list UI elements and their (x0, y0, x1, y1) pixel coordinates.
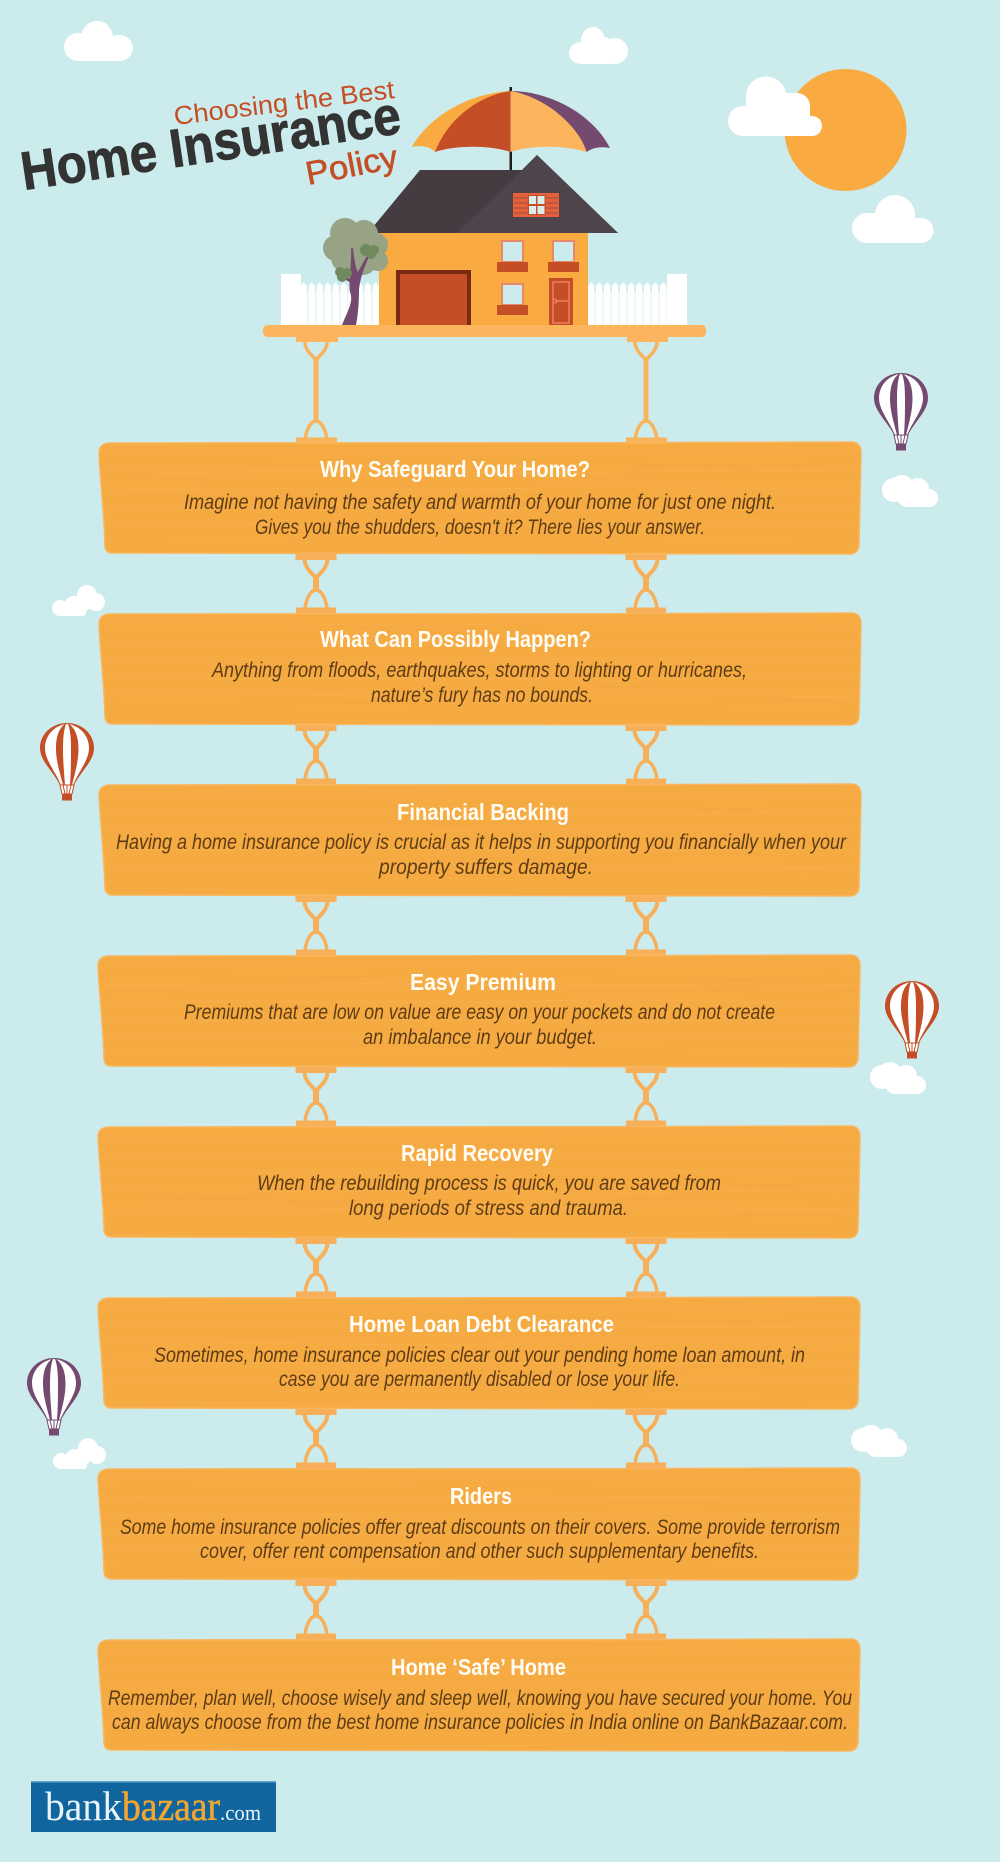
heading: Rapid Recovery (401, 1140, 553, 1166)
logo text: bank: bank (45, 1783, 122, 1829)
title line: Home Insurance: Home Insurance (17, 85, 404, 202)
heading: What Can Possibly Happen? (320, 626, 591, 652)
cloud: right of board 6 (851, 1425, 907, 1457)
body text: Anything from floods, earthquakes, storms to lighting or hurricanes, (210, 658, 747, 682)
icon: purple balloon top right (874, 373, 928, 450)
window upper right (548, 241, 579, 272)
heading: Home ‘Safe’ Home (391, 1654, 566, 1680)
window lower (497, 284, 528, 315)
body text: Sometimes, home insurance policies clear out your pending home loan amount, in (154, 1343, 805, 1367)
icon: purple balloon left (27, 1358, 81, 1436)
cloud: top left (64, 21, 133, 61)
body text: property suffers damage. (378, 855, 593, 879)
window upper left (497, 241, 528, 272)
connector: platform left (296, 342, 337, 442)
connectors between boards (296, 552, 666, 1640)
body text: Gives you the shudders, doesn't it? There lies your answer. (255, 515, 705, 539)
cloud: right of board 1 (882, 475, 938, 507)
panel: Rapid Recovery (98, 1126, 860, 1238)
title (17, 74, 404, 202)
heading: Financial Backing (397, 799, 569, 825)
heading: Why Safeguard Your Home? (320, 456, 590, 482)
icon: red balloon left (40, 723, 94, 800)
cloud: below purple balloon left (53, 1438, 106, 1469)
house wall (379, 233, 588, 325)
heading: Home Loan Debt Clearance (349, 1311, 614, 1337)
body text: Remember, plan well, choose wisely and sleep well, knowing you have secured your home. You (108, 1686, 852, 1710)
dormer window (513, 193, 559, 217)
panel: Home Loan Debt Clearance (98, 1297, 860, 1409)
title line: Policy: Policy (302, 138, 401, 192)
body text: Having a home insurance policy is crucial as it helps in supporting you financially when your (116, 830, 847, 854)
body text: When the rebuilding process is quick, you are saved from (257, 1171, 721, 1195)
cloud: below red balloon right (870, 1062, 926, 1094)
body text: an imbalance in your budget. (363, 1025, 597, 1049)
panel: Financial Backing (99, 784, 861, 896)
cloud: below sun (852, 195, 934, 243)
fence: left (281, 274, 379, 325)
cloud: left of board 2 (52, 585, 105, 616)
body text: long periods of stress and trauma. (349, 1196, 628, 1220)
panel: Home Safe Home (98, 1639, 860, 1751)
body text: nature’s fury has no bounds. (371, 683, 593, 707)
icon: sun (784, 69, 906, 191)
tree (323, 218, 388, 325)
garage door (396, 270, 471, 325)
logo: bankbazaar.com (31, 1781, 276, 1832)
platform (263, 325, 706, 342)
roof (368, 155, 618, 233)
panel: Easy Premium (98, 955, 860, 1067)
logo text: bazaar: bazaar (122, 1783, 220, 1829)
body text: Imagine not having the safety and warmth of your home for just one night. (184, 490, 776, 514)
connector: platform right (626, 342, 667, 442)
body text: Premiums that are low on value are easy on your pockets and do not create (184, 1000, 775, 1024)
panel: What Can Possibly Happen (99, 613, 861, 725)
body text: case you are permanently disabled or lose your life. (279, 1367, 680, 1391)
fence: right (588, 274, 687, 325)
cloud: over sun (728, 76, 822, 136)
body text: Some home insurance policies offer great discounts on their covers. Some provide terrorism (120, 1515, 840, 1539)
heading: Easy Premium (410, 969, 556, 995)
icon: red balloon right (885, 981, 939, 1058)
logo text: .com: .com (220, 1800, 261, 1825)
front door (549, 278, 573, 325)
body text: can always choose from the best home insurance policies in India online on BankBazaar.com. (112, 1710, 848, 1734)
panel: Why Safeguard Your Home (99, 442, 861, 554)
heading: Riders (450, 1483, 512, 1509)
panel: Riders (98, 1468, 860, 1580)
title line: Choosing the Best: Choosing the Best (172, 74, 397, 131)
cloud: top middle (569, 27, 628, 64)
roof gable (457, 155, 618, 233)
house (368, 155, 618, 325)
icon: umbrella (412, 87, 610, 171)
body text: cover, offer rent compensation and other such supplementary benefits. (200, 1539, 759, 1563)
